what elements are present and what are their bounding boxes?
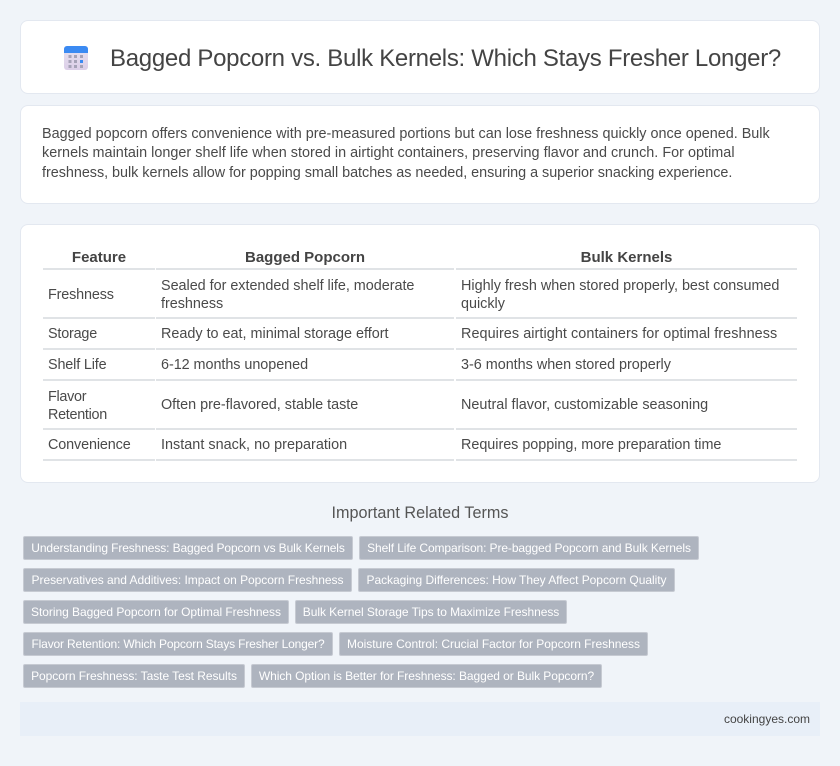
comparison table: Convenience [48,437,131,453]
related term tags: Popcorn Freshness: Taste Test Results [31,669,237,683]
comparison table: Shelf Life [48,357,107,373]
comparison table: Requires airtight containers for optimal freshness [461,326,777,342]
comparison table: Neutral flavor, customizable seasoning [461,397,708,413]
title: Bagged Popcorn vs. Bulk Kernels: Which Stays Fresher Longer? [110,45,781,72]
related term tags: Bulk Kernel Storage Tips to Maximize Freshness [303,605,559,619]
comparison table: freshness [161,296,223,312]
comparison table: 3-6 months when stored properly [461,357,671,373]
header card [20,20,820,94]
related term tags: Storing Bagged Popcorn for Optimal Freshness [31,605,281,619]
intro text: kernels maintain longer shelf life when stored in airtight containers, preserving flavor and crunch. For optimal [42,145,735,161]
intro text: Bagged popcorn offers convenience with pre-measured portions but can lose freshness quickly once opened. Bulk [42,126,770,142]
comparison table: Feature [72,249,126,266]
footer source: cookingyes.com [724,712,810,726]
related term tags: Which Option is Better for Freshness: Bagged or Bulk Popcorn? [259,669,594,683]
intro text: freshness, bulk kernels allow for popping small batches as needed, ensuring a superior snacking experience. [42,165,732,181]
comparison table: Highly fresh when stored properly, best consumed [461,278,779,294]
related term tags: Preservatives and Additives: Impact on Popcorn Freshness [32,573,343,587]
comparison table: Bulk Kernels [581,249,672,266]
table card [20,224,820,483]
related term tags: Shelf Life Comparison: Pre-bagged Popcorn and Bulk Kernels [367,541,691,555]
icon: calendar [64,46,88,70]
comparison table: Freshness [48,287,114,303]
comparison table: quickly [461,296,505,312]
comparison table: Instant snack, no preparation [161,437,347,453]
comparison table: Flavor [48,389,86,405]
comparison table: Retention [48,407,107,423]
related term tags: Flavor Retention: Which Popcorn Stays Fresher Longer? [32,637,324,651]
intro text [42,126,770,181]
related term tags: Understanding Freshness: Bagged Popcorn vs Bulk Kernels [31,541,345,555]
related term tags: Moisture Control: Crucial Factor for Popcorn Freshness [347,637,640,651]
comparison table: Ready to eat, minimal storage effort [161,326,389,342]
comparison table: Requires popping, more preparation time [461,437,721,453]
comparison table: Sealed for extended shelf life, moderate [161,278,414,294]
footer bar [20,702,820,736]
intro card [20,105,820,204]
related terms heading: Important Related Terms [332,504,508,522]
comparison table: 6-12 months unopened [161,357,308,373]
comparison table: Often pre-flavored, stable taste [161,397,358,413]
comparison table: Bagged Popcorn [245,249,365,266]
related term tags: Packaging Differences: How They Affect Popcorn Quality [366,573,666,587]
comparison table: Storage [48,326,97,342]
